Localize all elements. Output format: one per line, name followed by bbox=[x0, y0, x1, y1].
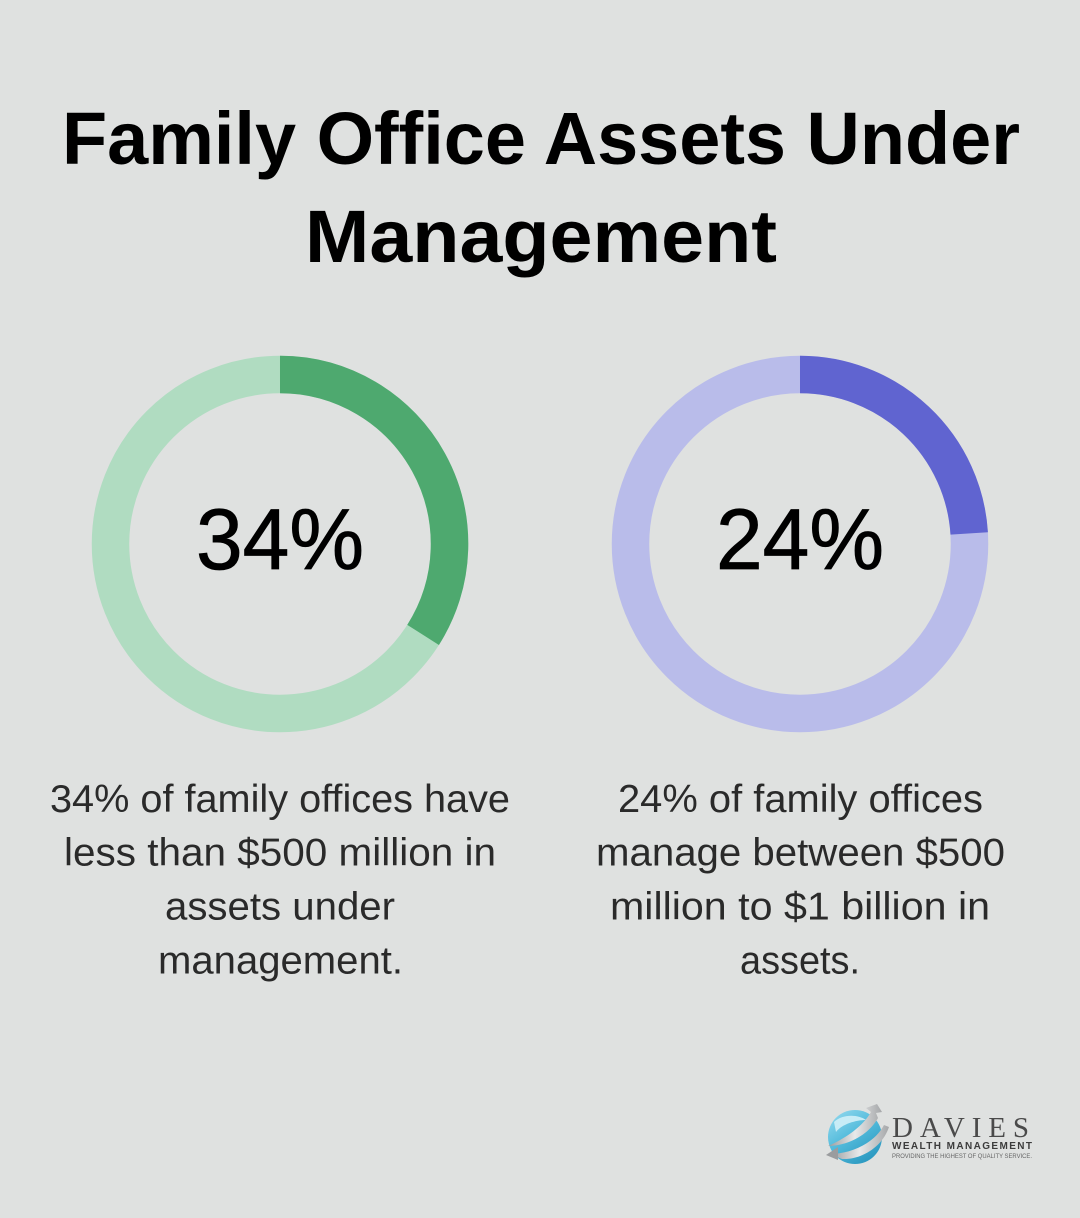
title: Management bbox=[305, 195, 777, 278]
value: 34%: 34% bbox=[196, 492, 364, 588]
description: 24%: 24% of family offices bbox=[618, 778, 983, 821]
description: 34%: management. bbox=[158, 940, 403, 982]
value: 24%: 24% bbox=[716, 492, 884, 588]
title: Family Office Assets Under bbox=[62, 97, 1020, 180]
logo tagline: PROVIDING THE HIGHEST OF QUALITY SERVICE. bbox=[892, 1153, 1032, 1160]
description: 34%: 34% of family offices have bbox=[50, 778, 510, 821]
description: 24%: assets. bbox=[740, 940, 860, 982]
logo wordmark: DAVIES bbox=[892, 1112, 1029, 1144]
donut chart: 34% bbox=[110, 374, 450, 714]
logo subtitle: WEALTH MANAGEMENT bbox=[892, 1141, 1032, 1152]
logo: Davies Wealth Management bbox=[826, 1104, 1032, 1164]
description: 24%: million to $1 billion in bbox=[610, 886, 990, 928]
description: 34% bbox=[50, 778, 510, 982]
title bbox=[62, 97, 1020, 278]
panel: 24% statistic bbox=[596, 374, 1005, 982]
description: 34%: assets under bbox=[165, 886, 395, 928]
description: 24%: manage between $500 bbox=[596, 832, 1005, 874]
description: 34%: less than $500 million in bbox=[64, 832, 496, 874]
icon: globe with arrows bbox=[826, 1104, 889, 1164]
donut chart: 24% bbox=[630, 374, 970, 714]
description: 24% bbox=[596, 778, 1005, 982]
panel: 34% statistic bbox=[50, 374, 510, 982]
